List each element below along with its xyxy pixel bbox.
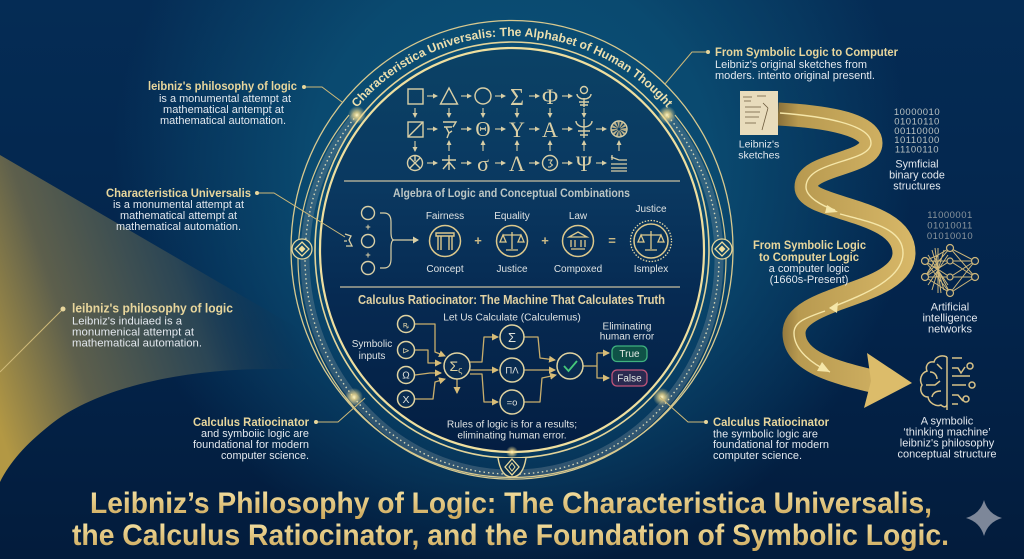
binary code block: 10110100: [894, 135, 940, 146]
row 2 letters: Θ: [475, 117, 491, 141]
callout: characteristica universalis: Characteristica Universalis: [106, 186, 251, 200]
label: thinking machine: A symbolic: [921, 416, 974, 428]
medallion left: [292, 239, 312, 259]
label: thinking machine: ‘thinking machine’: [903, 426, 991, 438]
binary code block 2: 11000001: [927, 210, 973, 221]
callout: calculus ratiocinator left: foundational for modern: [193, 439, 309, 451]
processor node: [444, 353, 470, 379]
rules text: [447, 420, 577, 442]
label: thinking machine: [897, 416, 997, 460]
label: ai networks: networks: [928, 324, 973, 336]
concept: equality: Equality: [494, 211, 530, 222]
binary code block: 10000010: [894, 107, 940, 118]
three input circles with bracket: +: [365, 250, 371, 260]
callout: leibniz left: Leibniz's induiaed is a: [72, 316, 183, 328]
icon: neural network: [922, 244, 978, 296]
callout: calculus ratiocinator left: Calculus Ratiocinator: [193, 415, 309, 429]
true box: True: [619, 349, 640, 360]
callout: from symbolic logic to computer: Leibniz's original sketches from: [715, 59, 867, 71]
rules text: eliminating human error.: [457, 430, 567, 442]
callout: calculus ratiocinator left: computer science.: [221, 450, 309, 462]
concept: law: Compoxed: [554, 264, 602, 275]
false box: [612, 370, 647, 386]
check node: [557, 353, 583, 379]
input nodes: ⊳: [402, 346, 410, 356]
row 1 symbols: [408, 86, 591, 107]
eliminating label: human error: [600, 332, 655, 342]
operator nodes: Σ: [508, 330, 516, 345]
input nodes: Ω: [402, 370, 410, 382]
divider: [340, 286, 680, 288]
binary code block 2: 01010011: [927, 220, 973, 232]
plus: +: [474, 233, 482, 248]
grid arrows: [415, 96, 619, 163]
binary code block 2: [927, 210, 973, 242]
inputs label: inputs: [359, 351, 385, 362]
callout: calculus ratiocinator right: foundational for modern: [713, 439, 829, 451]
input nodes: ꝶ: [403, 320, 410, 330]
callout: calculus ratiocinator right: [660, 397, 829, 462]
label: binary structures: Symficial: [895, 158, 939, 170]
callout: characteristica universalis: is a monumental attempt at: [113, 199, 244, 211]
label: binary structures: [889, 158, 945, 192]
row 2 letters: Α: [542, 117, 558, 142]
ribbon body: [778, 114, 904, 381]
gold swoosh background: [0, 155, 330, 482]
label: binary structures: structures: [893, 180, 941, 192]
small glyph: [344, 234, 352, 246]
icon: brain circuit: [921, 356, 975, 410]
subheading: Let Us Calculate (Calculemus): [443, 312, 581, 324]
callout: calculus ratiocinator right: computer science.: [713, 450, 802, 462]
divider: [344, 180, 680, 182]
row 2 letters: [475, 117, 558, 142]
label: center ribbon: From Symbolic Logic: [753, 240, 867, 252]
callout: leibniz top left: [148, 79, 342, 127]
arc title: Characteristica Universalis: The Alphabet of Human Thought: [352, 27, 672, 108]
rules text: Rules of logic is for a results;: [447, 420, 577, 430]
callout: leibniz top left: mathematical automation.: [160, 115, 286, 127]
eliminating label: Eliminating: [603, 322, 651, 332]
three input circles with bracket: [362, 206, 419, 274]
concept: fairness: [426, 211, 464, 275]
callout: from symbolic logic to computer: From Symbolic Logic to Computer: [715, 45, 898, 59]
label: thinking machine: conceptual structure: [897, 448, 997, 460]
callout: characteristica universalis: mathematical automation.: [116, 221, 241, 233]
label: ai networks: intelligence: [922, 312, 978, 324]
callout: characteristica universalis: mathematical attempt at: [120, 210, 237, 222]
label: sketches: sketches: [738, 150, 780, 162]
concept: justice: [630, 204, 672, 275]
callout: calculus ratiocinator left: and symboiic logic are: [201, 428, 309, 440]
concept: law: Law: [569, 211, 588, 222]
eliminating label: [600, 322, 655, 342]
binary code block: [894, 107, 940, 156]
panel: central circle: [290, 20, 734, 480]
panel: algebra of logic: [344, 186, 672, 275]
concept: fairness: Concept: [426, 264, 464, 275]
callout: from symbolic logic to computer: [665, 45, 898, 84]
operator nodes: ΠΛ: [505, 366, 519, 376]
heading: Algebra of Logic and Conceptual Combinations: [393, 186, 630, 200]
plus: +: [541, 233, 549, 248]
input nodes: [398, 316, 414, 408]
concept: equality: [494, 211, 530, 275]
false box: False: [617, 374, 642, 384]
callout: calculus ratiocinator right: the symbolic logic are: [713, 428, 818, 440]
concept: justice: Ismplex: [634, 264, 668, 275]
row 1 letters: Φ: [542, 84, 558, 109]
highlight line: [780, 113, 903, 372]
callout: from symbolic logic to computer: moders. intento original presentl.: [715, 70, 875, 82]
binary code block: 00110000: [894, 126, 940, 137]
label: binary structures: binary code: [889, 170, 945, 182]
processor node: Σ: [450, 358, 458, 374]
callout: leibniz top left: is a monumental attempt at: [159, 93, 291, 105]
label: ai networks: Artificial: [931, 302, 969, 314]
title: the Calculus Ratiocinator, and the Foundation of Symbolic Logic.: [72, 519, 949, 552]
title: [72, 487, 949, 552]
arrowhead: [864, 353, 912, 408]
callout: leibniz left: monumenical attempt at: [72, 326, 194, 338]
panel: calculus ratiocinator: [352, 293, 665, 442]
row 2 letters: Υ: [509, 117, 525, 142]
row 3 letters: σ: [477, 151, 489, 176]
label: center ribbon: to Computer Logic: [759, 252, 860, 264]
row 3 letters: Λ: [509, 151, 525, 176]
row 1 letters: [510, 84, 558, 111]
title: Leibniz’s Philosophy of Logic: The Characteristica Universalis,: [90, 487, 932, 520]
callout: leibniz left: leibniz's philosophy of logic: [72, 300, 233, 316]
label: sketches: [738, 138, 780, 162]
medallion bottom: [498, 458, 526, 477]
medallion right: [712, 239, 732, 259]
connectors: [415, 324, 609, 402]
equals: =: [608, 233, 616, 248]
row 3 symbols: [408, 155, 627, 171]
concept: law: [554, 211, 602, 275]
label: center ribbon: (1660s-Present): [770, 274, 848, 286]
callout: calculus ratiocinator left: [193, 398, 365, 462]
row 3 letters: Ψ: [576, 151, 593, 176]
inputs label: Symbolic: [352, 339, 392, 350]
binary code block: 11100110: [895, 144, 939, 156]
highlight arrowheads: [817, 205, 838, 372]
heading: Calculus Ratiocinator: The Machine That Calculates Truth: [358, 293, 665, 307]
concept: fairness: Fairness: [426, 211, 464, 222]
callout: characteristica universalis: [106, 186, 345, 237]
sparkles: [345, 106, 676, 458]
row 1 letters: Σ: [510, 85, 524, 111]
ornamental rings: [291, 20, 733, 479]
row 2 symbols: [408, 119, 627, 138]
label: center ribbon: [753, 240, 867, 286]
icon: four-point star: [966, 500, 1002, 536]
label: sketches: Leibniz's: [739, 138, 779, 150]
row 3 letters: [477, 151, 593, 176]
operator nodes: [500, 325, 524, 414]
concept: equality: Justice: [496, 264, 528, 275]
inputs label: [352, 339, 392, 362]
callout: leibniz top left: mathematical antempt at: [163, 104, 284, 116]
callout: leibniz left: [0, 300, 233, 372]
true box: [612, 346, 647, 362]
callout: leibniz left: mathematical automation.: [72, 338, 202, 350]
circle disc: [320, 48, 704, 452]
symbol alphabet grid: [408, 84, 627, 176]
callout: leibniz top left: leibniz's philosophy of logic: [148, 79, 297, 93]
label: center ribbon: a computer logic: [769, 263, 850, 275]
three input circles with bracket: +: [365, 222, 371, 232]
ribbon arrow: [778, 113, 912, 408]
input nodes: X: [402, 394, 410, 406]
callout: calculus ratiocinator right: Calculus Ratiocinator: [713, 415, 829, 429]
label: thinking machine: leibniz's philosophy: [900, 438, 995, 450]
operator nodes: =o: [507, 398, 517, 408]
label: ai networks: [922, 302, 978, 336]
concept: justice: Justice: [635, 204, 667, 215]
binary code block: 01010110: [894, 116, 940, 128]
binary code block 2: 01010010: [927, 231, 973, 242]
icon: leibniz sketch: [740, 91, 778, 135]
processor node: ς: [458, 365, 463, 375]
